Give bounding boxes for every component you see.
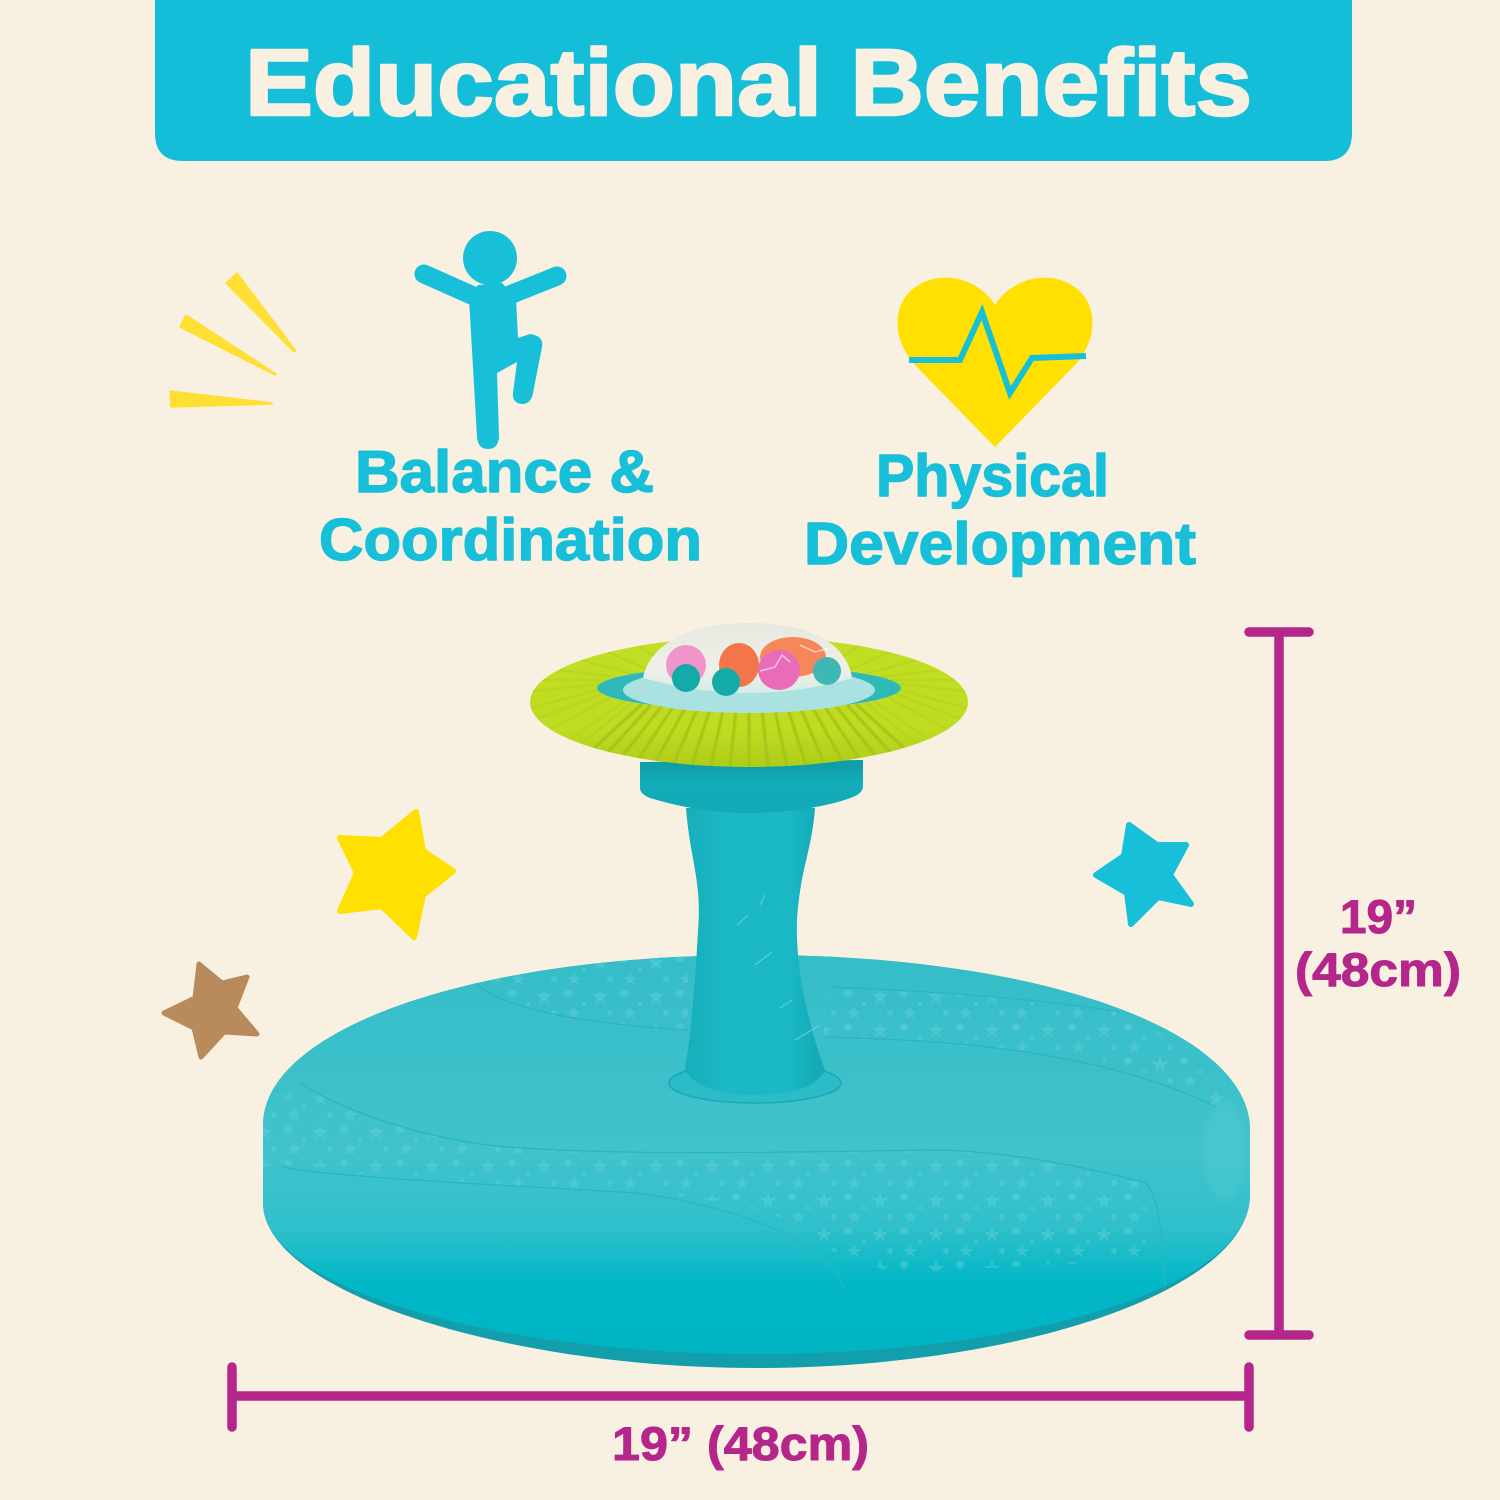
icon: balancing person	[424, 231, 557, 449]
title banner	[155, 0, 1352, 161]
height label	[1295, 890, 1461, 996]
icon: yellow burst rays	[170, 273, 296, 407]
icon: brown star	[164, 964, 257, 1057]
heading: balance and coordination: Coordination	[319, 507, 702, 573]
toy: sit and spin product	[263, 623, 1250, 1368]
height label: (48cm)	[1295, 943, 1461, 996]
toy neck	[685, 808, 825, 1095]
height label: 19”	[1340, 890, 1417, 943]
title: Educational Benefits	[245, 30, 1252, 136]
heading: balance and coordination: Balance &	[355, 439, 654, 505]
toy ribbed green ring	[530, 637, 968, 767]
toy inner recess	[597, 666, 901, 710]
width label: 19” (48cm)	[612, 1417, 869, 1470]
toy clear dome	[643, 623, 852, 693]
heading: physical development	[804, 443, 1196, 577]
toy base socket	[669, 1063, 841, 1103]
heading: balance and coordination	[319, 439, 702, 573]
icon: yellow star	[340, 812, 453, 937]
heading: physical development: Development	[804, 511, 1196, 577]
toy base disc	[263, 955, 1250, 1368]
icon: blue star	[1096, 825, 1191, 924]
dimension: height	[1249, 632, 1461, 1335]
toy beads	[666, 637, 841, 696]
toy collar	[640, 760, 863, 813]
heading: physical development: Physical	[876, 443, 1109, 509]
dimension: width	[232, 1367, 1249, 1470]
toy dome plate	[623, 667, 875, 713]
icon: heart with pulse	[898, 278, 1092, 447]
